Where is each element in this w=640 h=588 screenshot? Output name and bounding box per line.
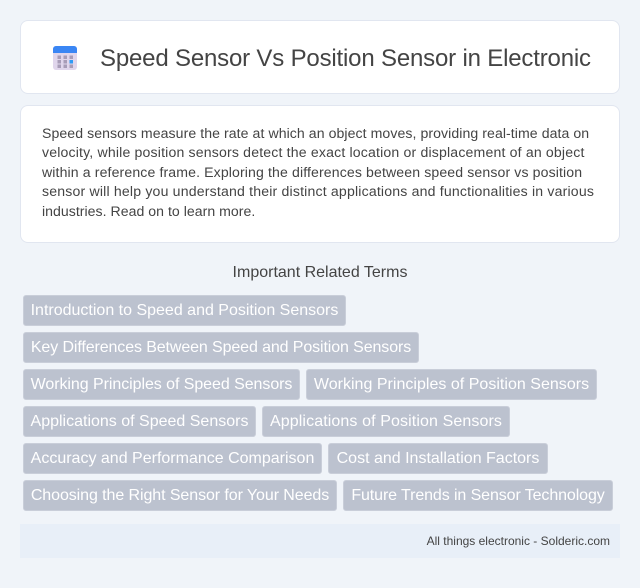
related terms tags: Introduction to Speed and Position Sensors [31, 302, 338, 319]
intro text: velocity, while position sensors detect the exact location or displacement of an object [42, 144, 585, 160]
footer text: All things electronic - Solderic.com [427, 534, 610, 548]
related terms tags: Future Trends in Sensor Technology [351, 487, 605, 504]
related terms tags: Applications of Position Sensors [270, 413, 502, 430]
related terms tags: Key Differences Between Speed and Position Sensors [31, 339, 411, 356]
title: Speed Sensor Vs Position Sensor in Electronic [100, 44, 591, 72]
intro text: Speed sensors measure the rate at which an object moves, providing real-time data on [42, 125, 589, 141]
intro text: industries. Read on to learn more. [42, 203, 255, 219]
icon: calendar [53, 46, 77, 70]
intro paragraph card [20, 105, 620, 243]
related terms tags: Choosing the Right Sensor for Your Needs [31, 487, 329, 504]
related terms tags: Working Principles of Speed Sensors [31, 376, 292, 393]
related terms tags: Accuracy and Performance Comparison [31, 450, 314, 467]
related terms heading: Important Related Terms [233, 264, 407, 281]
related terms tags: Applications of Speed Sensors [31, 413, 248, 430]
header card [20, 20, 620, 94]
related terms tags [23, 295, 613, 511]
related terms tags: Working Principles of Position Sensors [314, 376, 589, 393]
footer [20, 524, 620, 558]
intro text [42, 125, 594, 219]
related terms tags: Cost and Installation Factors [337, 450, 539, 467]
intro text: within a reference frame. Exploring the differences between speed sensor vs position [42, 164, 582, 180]
intro text: sensor will help you understand their distinct applications and functionalities in various [42, 183, 594, 199]
